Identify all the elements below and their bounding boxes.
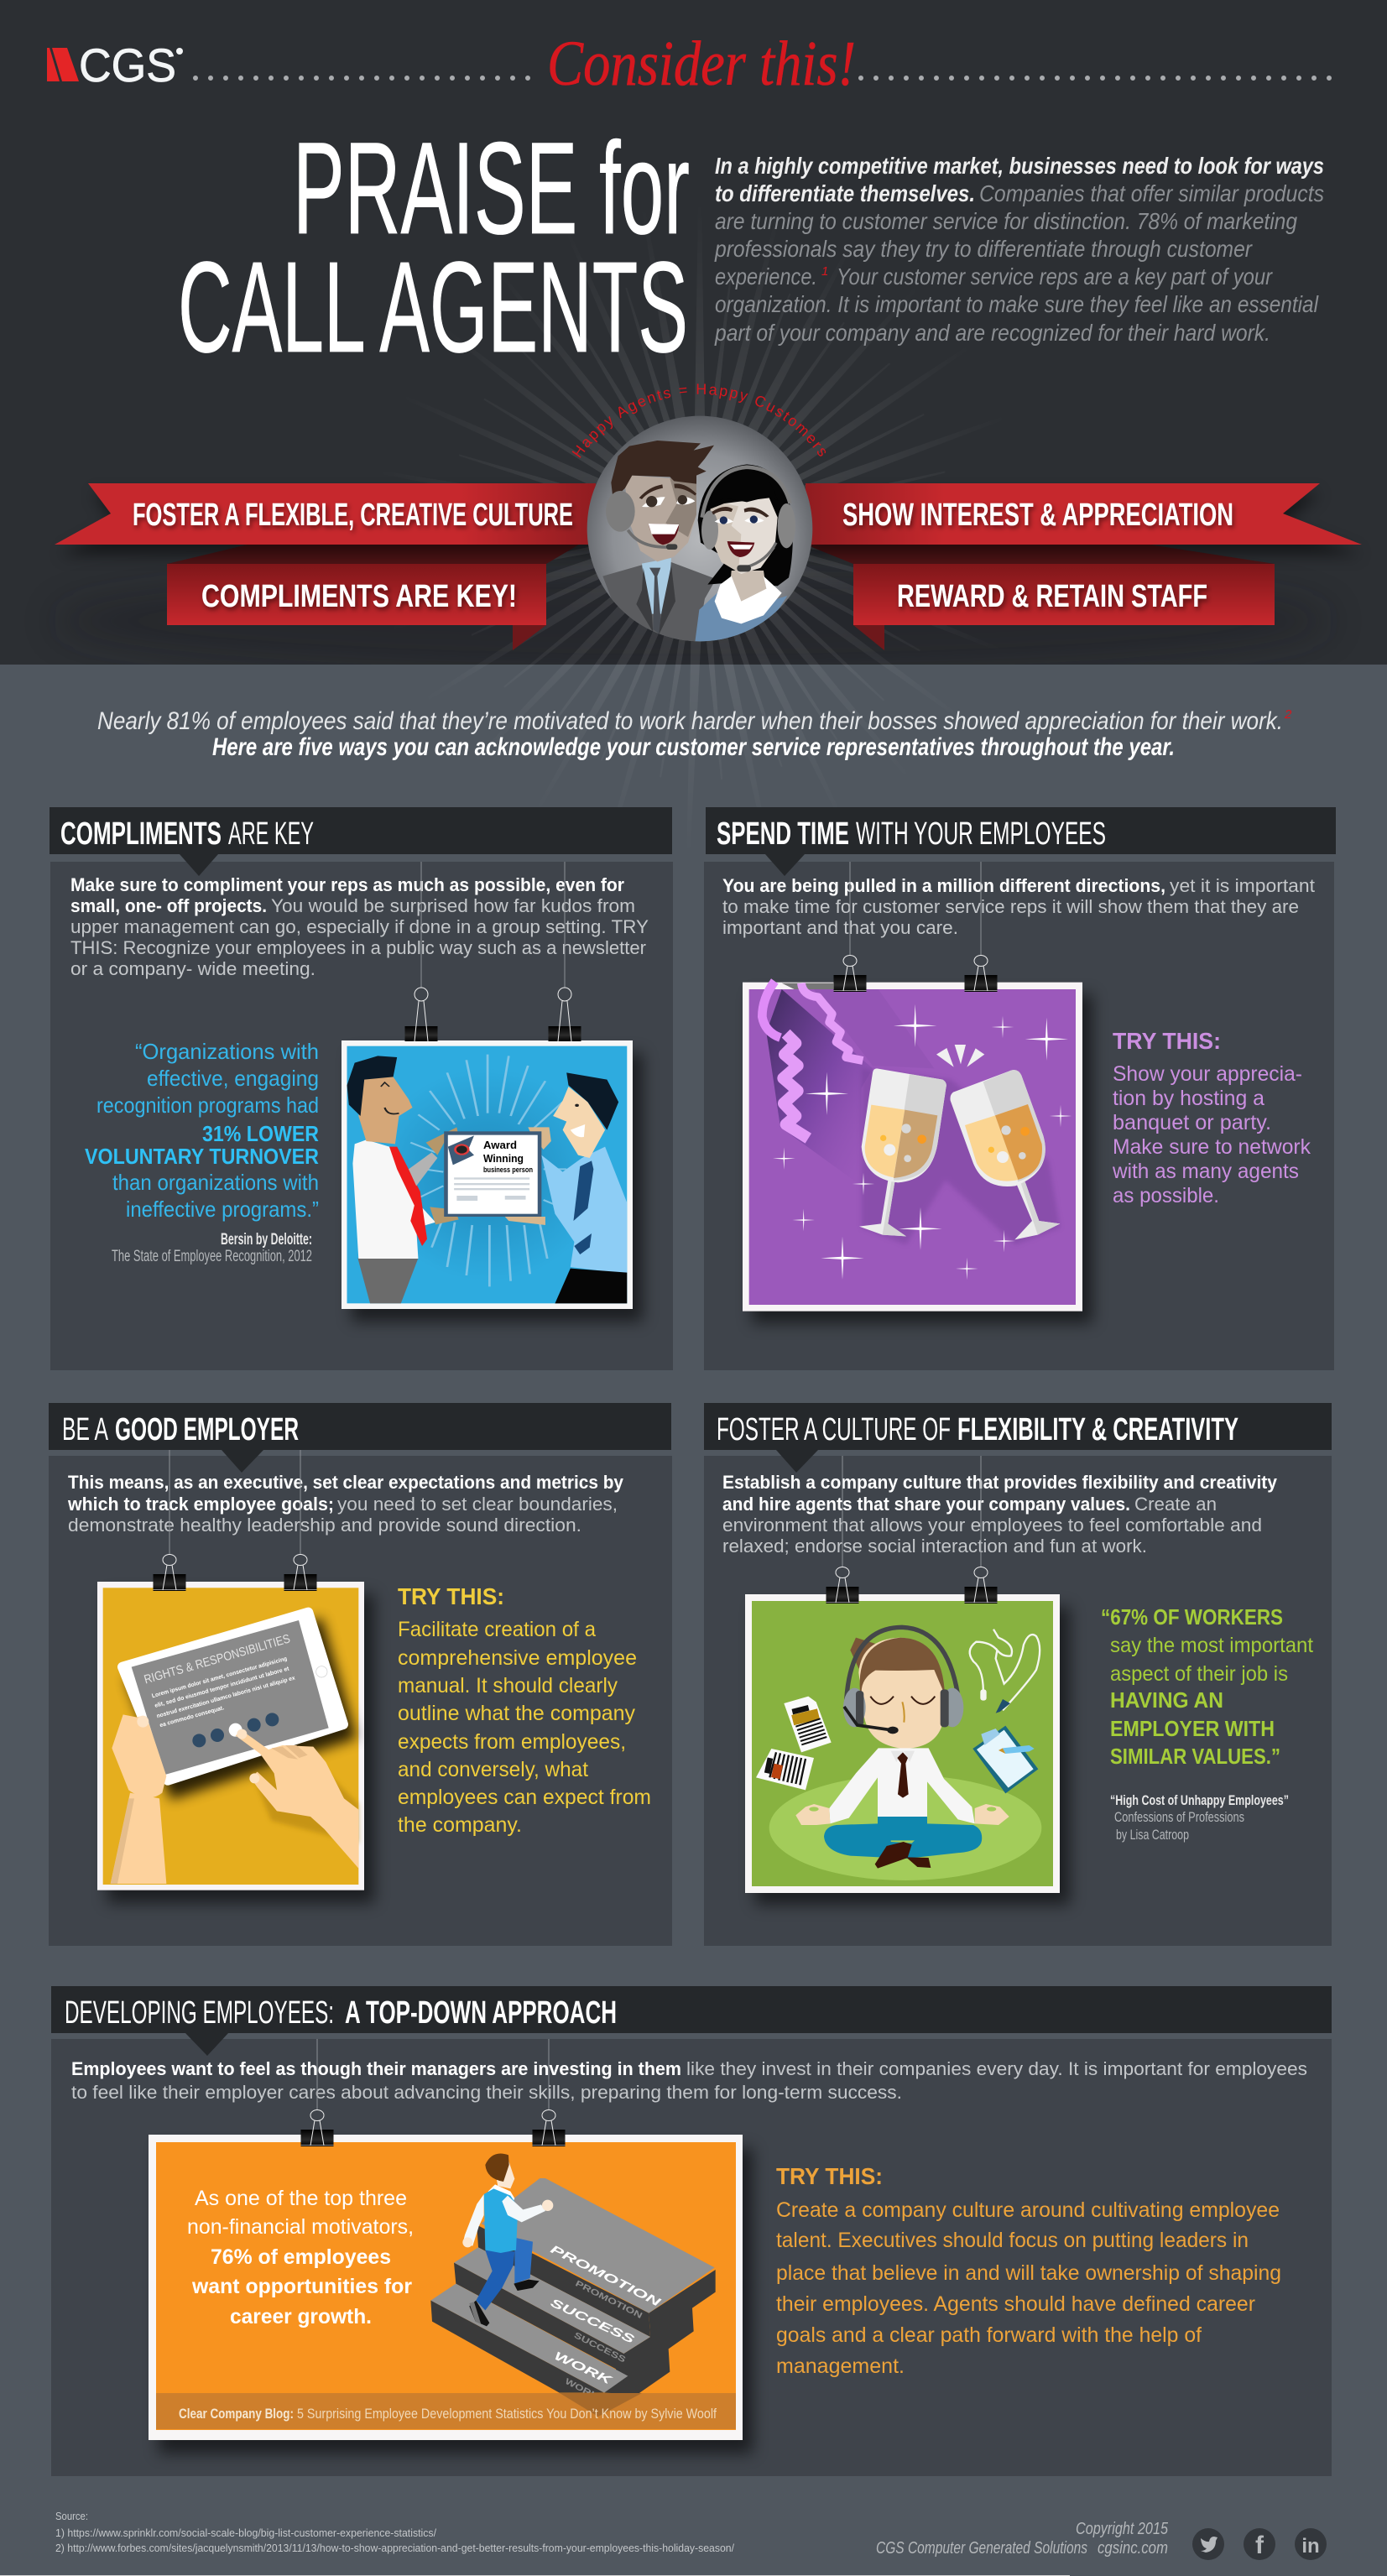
- body text: Create an: [1134, 1494, 1217, 1515]
- body text: This means, as an executive, set clear expectations and metrics by: [68, 1472, 624, 1493]
- heading: SPEND TIME: [717, 816, 849, 852]
- intro paragraph: to differentiate themselves.: [715, 180, 975, 206]
- try this: comprehensive employee: [398, 1646, 637, 1670]
- body text: environment that allows your employees to feel comfortable and: [722, 1515, 1262, 1536]
- try this: outline what the company: [398, 1702, 635, 1725]
- ribbon: compliments are key: COMPLIMENTS ARE KEY!: [201, 579, 517, 614]
- try this: the company.: [398, 1813, 522, 1837]
- man agent: [602, 441, 716, 644]
- try this: Facilitate creation of a: [398, 1618, 596, 1641]
- heading: A TOP-DOWN APPROACH: [345, 1995, 617, 2031]
- dotted rule: [196, 76, 1343, 81]
- heading: DEVELOPING EMPLOYEES:: [65, 1995, 334, 2031]
- intro statement: 2: [1284, 707, 1292, 722]
- footer sources: [55, 2510, 734, 2554]
- quote: The State of Employee Recognition, 2012: [112, 1248, 312, 1265]
- quote: effective, engaging: [147, 1066, 319, 1091]
- quote: EMPLOYER WITH: [1110, 1716, 1275, 1741]
- intro paragraph: are turning to customer service for distinction. 78% of marketing: [715, 208, 1297, 234]
- body text: [71, 2058, 1307, 2103]
- footer copyright: [876, 2520, 1169, 2558]
- intro paragraph: Companies that offer similar products: [979, 180, 1324, 206]
- quote: Confessions of Professions: [1114, 1809, 1244, 1825]
- quote: recognition programs had: [96, 1092, 319, 1118]
- heading: WITH YOUR EMPLOYEES: [856, 816, 1106, 852]
- stair labels: PROMOTION: [574, 2279, 644, 2321]
- try this: their employees. Agents should have defined career: [776, 2292, 1255, 2316]
- heading bar: [51, 1986, 1332, 2033]
- body text: upper management can go, especially if done in a group setting. TRY: [70, 916, 649, 937]
- tablet text: nostrud exercitation ullamco laboris nisi ut aliquip ex: [156, 1676, 296, 1719]
- title: [178, 116, 690, 379]
- heading: FLEXIBILITY & CREATIVITY: [957, 1412, 1238, 1447]
- tablet text: ea commodo consequat.: [159, 1705, 225, 1729]
- try this: TRY THIS:: [1113, 1028, 1221, 1054]
- heading bar: [50, 807, 672, 854]
- body text: yet it is important: [1170, 875, 1315, 896]
- body text: [722, 875, 1315, 938]
- heading: Consider this!: Consider this!: [547, 29, 856, 99]
- try this: employees can expect from: [398, 1786, 651, 1809]
- try this: expects from employees,: [398, 1730, 626, 1754]
- try this: management.: [776, 2354, 905, 2378]
- tablet text: [143, 1632, 296, 1729]
- body text: to feel like their employer cares about advancing their skills, preparing them for long-term success.: [71, 2082, 902, 2103]
- footer copyright: Copyright 2015: [1076, 2520, 1169, 2538]
- intro paragraph: experience.: [715, 263, 817, 289]
- intro paragraph: professionals say they try to differentiate through customer: [714, 236, 1253, 262]
- certificate text: [483, 1139, 533, 1174]
- quote: “67% OF WORKERS: [1101, 1604, 1283, 1630]
- poster statistic: [187, 2187, 414, 2328]
- try this: talent. Executives should focus on putting leaders in: [776, 2229, 1249, 2252]
- certificate text: Winning: [483, 1152, 524, 1165]
- body text: [67, 1472, 624, 1536]
- heading bar: [706, 807, 1336, 854]
- certificate text: business person: [483, 1165, 533, 1174]
- poster statistic: want opportunities for: [191, 2275, 412, 2298]
- binder clips: [404, 988, 581, 1041]
- body text: small, one- off projects.: [70, 895, 267, 916]
- icon: facebook: [1244, 2528, 1275, 2560]
- poster: career stairs: [149, 2039, 753, 2453]
- quote: “Organizations with: [135, 1039, 319, 1064]
- heading: ARE KEY: [228, 816, 314, 852]
- ribbon: reward and retain staff: REWARD & RETAIN STAFF: [897, 579, 1207, 614]
- tablet text: RIGHTS & RESPONSIBILITIES: [143, 1632, 292, 1687]
- poster: meditating employee: [745, 1456, 1070, 1905]
- footer copyright: cgsinc.com: [1098, 2539, 1168, 2558]
- panel: developing employees: [51, 1986, 1332, 2476]
- poster statistic: career growth.: [230, 2305, 372, 2328]
- body text: or a company- wide meeting.: [70, 958, 315, 979]
- body text: Employees want to feel as though their managers are investing in them: [71, 2058, 681, 2079]
- ribbon: foster a flexible, creative culture: FOSTER A FLEXIBLE, CREATIVE CULTURE: [133, 498, 573, 533]
- try this: Show your apprecia-: [1113, 1062, 1302, 1086]
- quote: aspect of their job is: [1110, 1662, 1288, 1686]
- quote: say the most important: [1110, 1634, 1313, 1657]
- ribbon: reward and retain staff: [853, 564, 1275, 625]
- icon: call agents in a sphere: [587, 416, 812, 644]
- poster statistic: 76% of employees: [211, 2245, 391, 2269]
- try this: Create a company culture around cultivating employee: [776, 2198, 1280, 2222]
- ribbon: show interest and appreciation: [806, 483, 1362, 650]
- stair labels: WORK: [552, 2349, 615, 2387]
- quote: HAVING AN: [1110, 1687, 1223, 1713]
- stair labels: SUCCESS: [549, 2296, 638, 2346]
- binder clips: [300, 2109, 566, 2146]
- heading bar: [704, 1403, 1332, 1450]
- body text: Make sure to compliment your reps as much as possible, even for: [70, 874, 624, 895]
- heading: COMPLIMENTS: [60, 816, 222, 852]
- title: CALL AGENTS: [178, 235, 688, 379]
- title: PRAISE for: [293, 116, 690, 262]
- quote: SIMILAR VALUES.”: [1110, 1744, 1280, 1769]
- icon: twitter: [1192, 2528, 1224, 2560]
- heading pointer: [185, 2033, 228, 2056]
- footer sources: 2) http://www.forbes.com/sites/jacquelynsmith/2013/11/13/how-to-show-appreciation-and-get-better-results-from-your-employees-this-holiday-season/: [55, 2542, 734, 2554]
- heading: FOSTER A CULTURE OF: [717, 1412, 951, 1447]
- try this: manual. It should clearly: [398, 1674, 618, 1697]
- try this: Make sure to network: [1113, 1135, 1311, 1159]
- heading: GOOD EMPLOYER: [115, 1412, 299, 1447]
- header band: [0, 0, 1387, 832]
- intro paragraph: Your customer service reps are a key part of your: [837, 263, 1273, 289]
- certificate text: Award: [483, 1139, 517, 1151]
- try this: TRY THIS:: [398, 1583, 504, 1609]
- try this: [1112, 1028, 1311, 1207]
- quote: VOLUNTARY TURNOVER: [85, 1144, 319, 1169]
- footer sources: Source:: [55, 2510, 88, 2522]
- heading bar: [49, 1403, 671, 1450]
- stair labels: WORK: [563, 2377, 601, 2402]
- quote: “High Cost of Unhappy Employees”: [1110, 1792, 1289, 1808]
- intro statement: Here are five ways you can acknowledge your customer service representatives throughout the year.: [212, 733, 1175, 761]
- ribbon: show interest and appreciation: SHOW INTEREST & APPRECIATION: [842, 498, 1233, 533]
- stair labels: [549, 2242, 664, 2402]
- panel: compliments are key: [50, 807, 673, 1370]
- poster source bar: [156, 2393, 736, 2429]
- intro paragraph: 1: [821, 264, 828, 279]
- stair labels: PROMOTION: [549, 2242, 664, 2309]
- try this: [398, 1583, 651, 1837]
- try this: place that believe in and will take ownership of shaping: [776, 2261, 1281, 2285]
- ribbon: compliments are key: [167, 564, 546, 625]
- try this: and conversely, what: [398, 1758, 588, 1781]
- try this: as possible.: [1113, 1184, 1219, 1207]
- quote: [1101, 1604, 1313, 1843]
- ribbons: [55, 483, 1362, 650]
- try this: goals and a clear path forward with the help of: [776, 2323, 1202, 2347]
- poster: tablet rights and responsibilities: [97, 1450, 374, 1903]
- icon: facebook: f: [1255, 2532, 1264, 2559]
- body text: which to track employee goals;: [67, 1494, 334, 1515]
- poster statistic: As one of the top three: [195, 2187, 407, 2210]
- try this: with as many agents: [1112, 1160, 1299, 1183]
- panel: spend time: [704, 807, 1336, 1370]
- body text: important and that you care.: [722, 917, 958, 938]
- quote: than organizations with: [112, 1170, 319, 1195]
- panel: be a good employer: [49, 1403, 672, 1946]
- illustration: man climbing stairs: [430, 2154, 716, 2402]
- binder clips: [834, 955, 997, 992]
- icon: linkedin: in: [1301, 2535, 1320, 2558]
- stair labels: SUCCESS: [572, 2331, 628, 2365]
- body text: THIS: Recognize your employees in a public way such as a newsletter: [70, 937, 646, 958]
- body text: demonstrate healthy leadership and provide sound direction.: [68, 1515, 581, 1536]
- body text: like they invest in their companies every day. It is important for employees: [686, 2058, 1307, 2079]
- logo: CGS: CGS: [79, 39, 176, 91]
- ribbon: foster a flexible, creative culture: [55, 483, 601, 650]
- quote: 31% LOWER: [202, 1121, 319, 1146]
- heading pointer: [765, 854, 805, 876]
- woman agent: [695, 464, 795, 642]
- poster statistic: non-financial motivators,: [187, 2215, 414, 2239]
- quote: by Lisa Catroop: [1116, 1827, 1189, 1843]
- body text: [722, 1472, 1278, 1557]
- curved tagline: Happy Agents = Happy Customers: [572, 383, 826, 458]
- try this: [776, 2163, 1281, 2378]
- heading pointer: [180, 854, 218, 876]
- footer copyright: CGS Computer Generated Solutions: [876, 2539, 1087, 2558]
- binder clips: [153, 1554, 317, 1591]
- poster: award handover: [342, 862, 643, 1322]
- heading pointer: [776, 1450, 818, 1473]
- binder clips: [826, 1567, 997, 1603]
- poster source bar: Clear Company Blog:: [179, 2406, 294, 2422]
- heading pointer: [222, 1450, 263, 1473]
- body text: and hire agents that share your company values.: [722, 1494, 1130, 1515]
- poster source bar: 5 Surprising Employee Development Statistics You Don’t Know by Sylvie Woolf: [297, 2406, 717, 2422]
- quote: [85, 1039, 319, 1265]
- try this: tion by hosting a: [1113, 1087, 1264, 1110]
- body text: You would be surprised how far kudos from: [271, 895, 635, 916]
- footer sources: 1) https://www.sprinklr.com/social-scale-blog/big-list-customer-experience-statistics/: [55, 2526, 436, 2539]
- intro paragraph: part of your company and are recognized for their hard work.: [714, 320, 1270, 346]
- body text: relaxed; endorse social interaction and fun at work.: [722, 1536, 1147, 1557]
- intro paragraph: [714, 153, 1324, 346]
- quote: ineffective programs.”: [126, 1197, 319, 1222]
- body text: You are being pulled in a million different directions,: [722, 875, 1165, 896]
- heading: [717, 816, 1106, 852]
- heading: [62, 1412, 299, 1447]
- sunburst rays: [373, 201, 1026, 856]
- body text: you need to set clear boundaries,: [337, 1494, 618, 1515]
- quote: Bersin by Deloitte:: [221, 1231, 312, 1249]
- icon: linkedin: [1295, 2528, 1327, 2560]
- tablet text: Lorem ipsum dolor sit amet, consectetur adipisicing: [151, 1656, 288, 1699]
- body text: Establish a company culture that provides flexibility and creativity: [722, 1472, 1278, 1493]
- heading: BE A: [62, 1412, 108, 1447]
- try this: banquet or party.: [1113, 1111, 1271, 1134]
- body text: [70, 874, 649, 979]
- body text: to make time for customer service reps it will show them that they are: [722, 896, 1299, 917]
- intro statement: [97, 707, 1292, 761]
- tablet text: elit, sed do eiusmod tempor incididunt ut labore et: [154, 1666, 290, 1709]
- panel: culture of flexibility and creativity: [704, 1403, 1332, 1946]
- try this: TRY THIS:: [776, 2163, 883, 2189]
- poster: champagne toast: [743, 862, 1092, 1323]
